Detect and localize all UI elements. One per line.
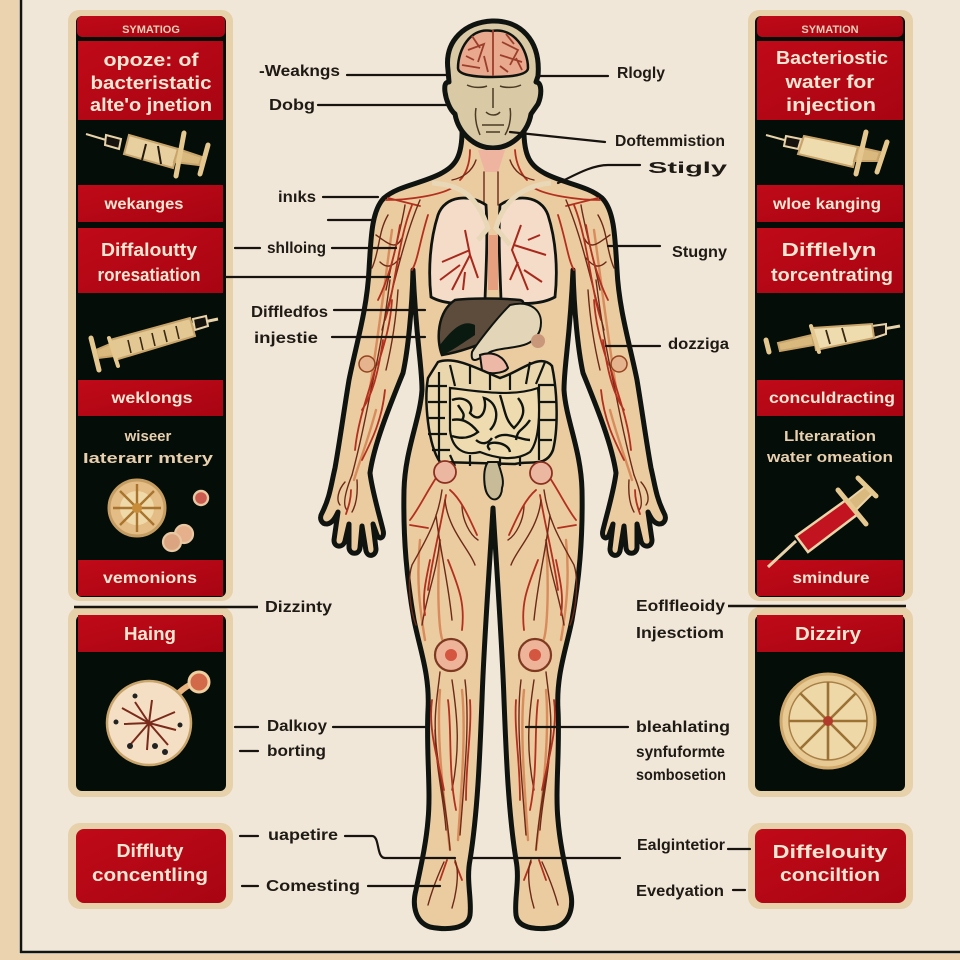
veins right limbs xyxy=(508,188,648,908)
labels left: Dobg xyxy=(269,97,315,114)
labels right: dozziga xyxy=(668,336,729,353)
text block: difficulty right: Difflelyn xyxy=(782,240,876,260)
labels left: Dalkıoy xyxy=(267,718,327,735)
large intestine xyxy=(426,360,557,466)
icon: syringe 1 xyxy=(86,133,208,176)
body outline xyxy=(321,125,665,929)
labels right: Evedyation xyxy=(636,883,724,900)
labels right: bleahlating xyxy=(636,719,730,736)
panel: left difficulty box: concentling xyxy=(92,865,208,885)
icon: syringe 2 xyxy=(91,316,218,370)
label: vemontions xyxy=(78,560,223,596)
labels right: synfuformte xyxy=(636,744,725,761)
text block: water omeation: Llteraration xyxy=(784,428,876,445)
text block: difficulty right xyxy=(757,228,903,293)
lungs xyxy=(430,183,556,303)
brain xyxy=(458,30,528,77)
panel: left symptoms column xyxy=(68,10,233,601)
labels left: inıks xyxy=(278,189,316,206)
text block: bacteriostatic water: Bacteriostic xyxy=(776,48,888,68)
labels left xyxy=(251,63,360,895)
labels left: borting xyxy=(267,743,326,760)
label: weklongs xyxy=(78,380,223,416)
head xyxy=(445,21,541,148)
knee joints xyxy=(435,639,551,671)
veins left limbs xyxy=(338,188,478,908)
text block: difficulty xyxy=(78,228,223,293)
text block: injection title: opoze: of xyxy=(104,50,200,70)
liver and stomach xyxy=(439,298,545,373)
text block: bacteriostatic water xyxy=(757,41,903,120)
label: wooe kanging xyxy=(757,185,903,222)
label: conculdracting: conculdracting xyxy=(769,390,895,407)
label: conculdracting xyxy=(757,380,903,416)
text block: difficulty: Diffaloutty xyxy=(101,240,197,260)
panel: right difficulty box: conciltion xyxy=(780,865,880,885)
icon: red syringe xyxy=(768,478,876,567)
heading: dizziness: Dizziry xyxy=(795,624,861,644)
icon: round cross-section xyxy=(781,674,875,768)
labels right: Stigly xyxy=(648,160,727,177)
human body figure xyxy=(321,21,665,929)
labels right: sombosetion xyxy=(636,767,726,784)
appendix and groin glands xyxy=(434,461,552,499)
label: weklongs: weklongs xyxy=(110,390,193,407)
panel: right difficulty box xyxy=(748,823,913,909)
icon: round cell xyxy=(107,672,209,765)
leader lines xyxy=(226,75,750,890)
panel: right dizziness xyxy=(748,607,913,797)
heading: hearing xyxy=(78,615,223,652)
small intestine xyxy=(450,388,539,458)
icon: syringe 4 xyxy=(766,324,900,352)
heading: left symptoms xyxy=(77,16,225,37)
text block: bacteriostatic water: water for xyxy=(784,72,874,92)
labels left: shlloing xyxy=(267,240,326,257)
text block: water omeation xyxy=(766,428,893,466)
icon: cell cluster xyxy=(109,480,208,551)
panel: left difficulty box xyxy=(68,823,233,909)
label: wekanges xyxy=(78,185,223,222)
heading: dizziness xyxy=(757,615,903,652)
horizontal divider left xyxy=(74,606,906,607)
text block: injection title: bacteristatic xyxy=(90,73,212,93)
heading: hearing: Haing xyxy=(124,624,176,644)
labels left: injestie xyxy=(254,330,318,347)
label: wooe kanging: wloe kanging xyxy=(772,196,881,213)
panel: right difficulty box: Diffelouity xyxy=(772,842,888,862)
text block: injection title xyxy=(78,41,223,120)
text block: difficulty: roresatiation xyxy=(98,265,200,285)
labels right: Stugny xyxy=(672,244,727,261)
labels right: Injesctiom xyxy=(636,625,724,642)
labels left: -Weakngs xyxy=(259,63,340,80)
labels left: Comesting xyxy=(266,878,360,895)
panel: left hearing xyxy=(68,607,233,797)
labels right: Doftemmistion xyxy=(615,133,725,150)
heading: right symptoms: SYMATION xyxy=(801,24,859,36)
label: vemontions: vemonions xyxy=(103,570,197,587)
labels right: Ealgintetior xyxy=(637,837,725,854)
panel: left difficulty box: Diffluty xyxy=(116,841,184,861)
text block: injection title: alte'o jnetion xyxy=(90,95,212,115)
neck vessels xyxy=(452,150,534,205)
text block: bacteriostatic water: injection xyxy=(786,95,876,115)
labels left: uapetire xyxy=(268,827,338,844)
heading: left symptoms: SYMATIOG xyxy=(122,24,180,36)
labels left: Diffledfos xyxy=(251,304,328,321)
text block: black panel note: wiseer xyxy=(124,428,172,445)
icon: syringe 3 xyxy=(766,132,887,174)
label: smindure xyxy=(757,560,903,596)
label: smindure: smindure xyxy=(792,570,870,587)
text block: black panel note: Iaterarr mtery xyxy=(83,450,214,467)
text block: difficulty right: torcentrating xyxy=(771,265,893,285)
labels right: Rlogly xyxy=(617,65,665,82)
label: wekanges: wekanges xyxy=(103,196,184,213)
labels right: Eoflfleoidy xyxy=(636,598,725,615)
text block: black panel note xyxy=(83,428,214,467)
labels right xyxy=(615,65,730,900)
heading: right symptoms xyxy=(757,16,903,37)
labels left: Dizzinty xyxy=(265,599,332,616)
panel: right symptoms column xyxy=(748,10,913,601)
text block: water omeation: water omeation xyxy=(766,449,893,466)
